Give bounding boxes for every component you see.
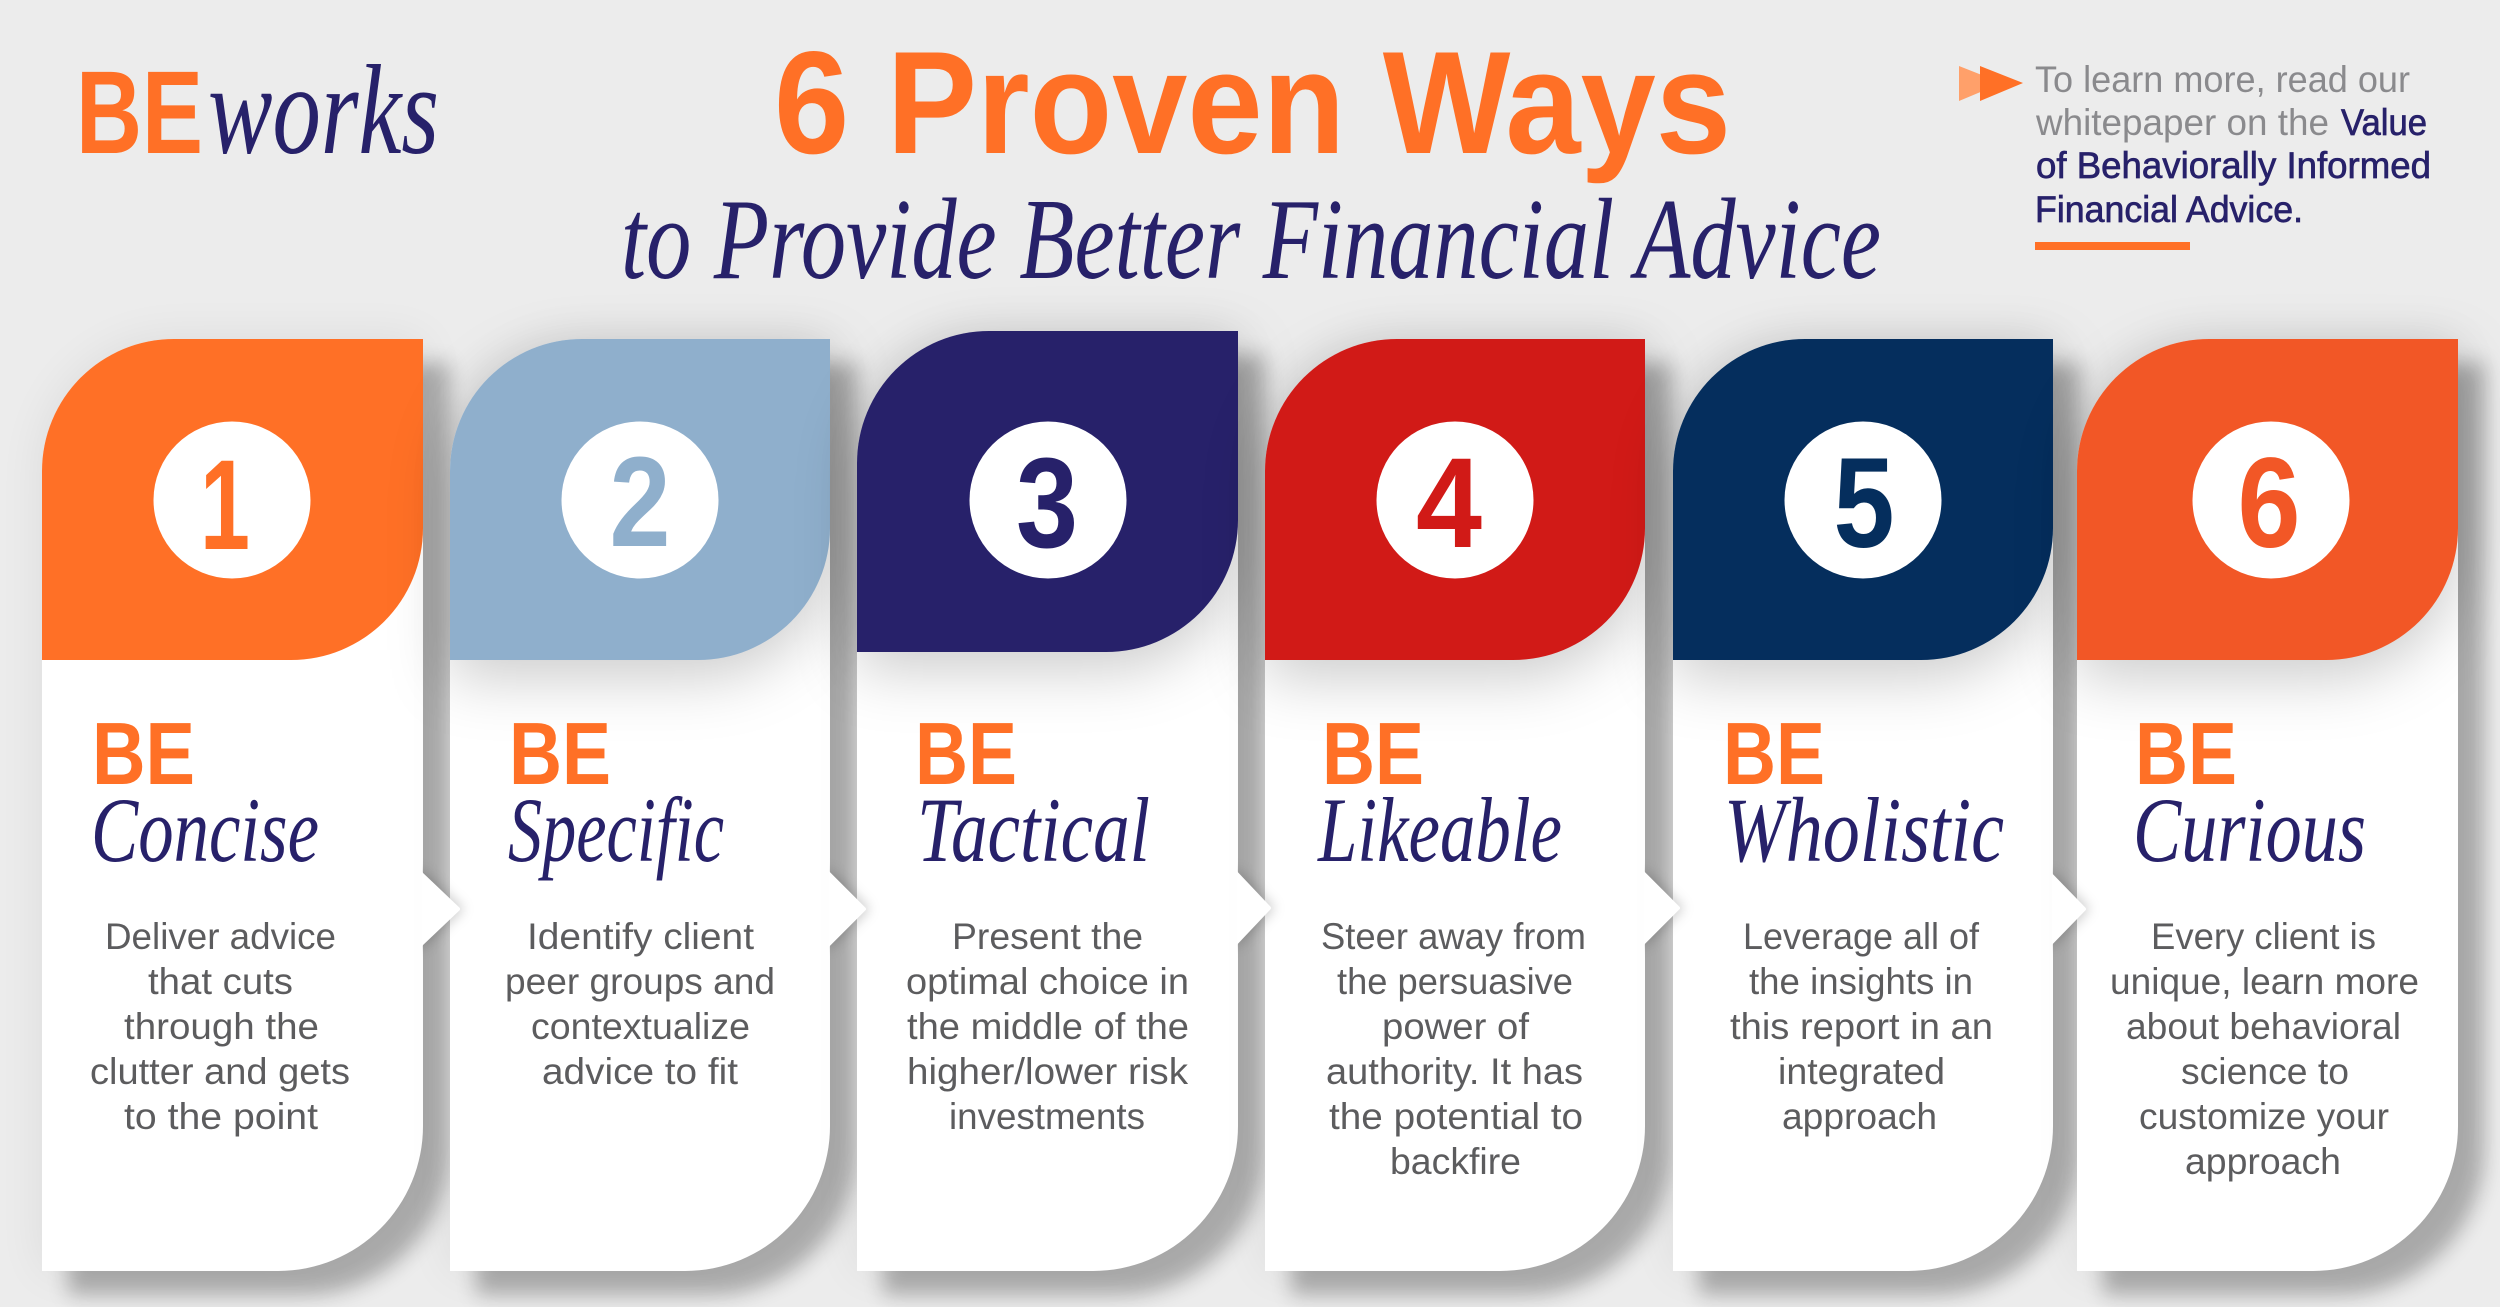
card 2 description: Identify client: [527, 916, 755, 957]
card 3 description: optimal choice in: [906, 961, 1189, 1002]
card 5 description: Leverage all of: [1743, 916, 1980, 957]
card 5 description: the insights in: [1749, 961, 1973, 1002]
card 3 description: the middle of the: [907, 1006, 1189, 1047]
card 5 header: [1673, 339, 2053, 660]
card 4 description: the potential to: [1329, 1096, 1583, 1137]
card 1 description: to the point: [124, 1096, 319, 1137]
card 2 description: contextualize: [531, 1006, 750, 1047]
card 6 description: science to: [2181, 1051, 2349, 1092]
panel: card 5 Be Wholistic: [1673, 339, 2053, 1271]
panel: card 6 Be Curious: [2077, 339, 2458, 1271]
arrow: card 4 to card 5: [1641, 871, 1678, 945]
card 6 description: Every client is: [2151, 916, 2376, 957]
card 2 description: peer groups and: [505, 961, 775, 1002]
card 4 heading: Likeable: [1316, 779, 1562, 881]
card 6 number: 6: [2238, 432, 2300, 575]
card 5 description: this report in an: [1730, 1006, 1993, 1047]
card 2 number: [562, 422, 718, 578]
logo: BEworks: [76, 39, 439, 181]
card 1 heading: Concise: [91, 779, 319, 881]
card 2 header: [450, 339, 830, 660]
callout text: Value: [2341, 102, 2427, 143]
card 4 description: Steer away from: [1321, 916, 1586, 957]
subtitle: to Provide Better Financial Advice: [621, 176, 1881, 303]
card 3 number: 3: [1016, 432, 1078, 575]
card 2 heading: BE: [509, 704, 611, 803]
card 1 description: through the: [124, 1006, 319, 1047]
panel: card 2 Be Specific: [450, 339, 830, 1271]
icon: double arrow: [1959, 66, 2023, 101]
card 1 description: clutter and gets: [90, 1051, 350, 1092]
card 4 heading: [1316, 704, 1562, 881]
card 6 header: [2077, 339, 2458, 660]
card 3 description: investments: [949, 1096, 1145, 1137]
card 6 description: [2110, 916, 2419, 1182]
card 1 description: that cuts: [148, 961, 293, 1002]
card 1 number: [154, 422, 310, 578]
card 2 heading: [508, 704, 724, 881]
callout text: of Behaviorally Informed: [2036, 145, 2431, 186]
card 6 number: [2192, 422, 2350, 578]
card 4 header: [1265, 339, 1645, 660]
card 3 heading: Tactical: [917, 779, 1150, 881]
card 1 header: [42, 339, 423, 660]
card 3 heading: BE: [915, 704, 1017, 803]
card 5 number: 5: [1834, 432, 1894, 575]
card 5 description: [1730, 916, 1993, 1137]
card 1 description: [90, 916, 350, 1137]
callout text: To learn more, read our: [2035, 59, 2410, 100]
card 4 description: the persuasive: [1337, 961, 1573, 1002]
card 1 description: Deliver advice: [105, 916, 336, 957]
card 4 description: power of: [1382, 1006, 1530, 1047]
card 3 description: Present the: [952, 916, 1143, 957]
panel: card 3 Be Tactical: [857, 331, 1238, 1271]
arrow: card 2 to card 3: [826, 871, 864, 947]
card 6 heading: [2133, 704, 2366, 881]
card 2 number: 2: [610, 431, 670, 574]
card 6 heading: BE: [2135, 704, 2237, 803]
logo: BEworks: works: [208, 39, 439, 181]
whitepaper callout: [1959, 59, 2431, 250]
card 6 description: unique, learn more: [2110, 961, 2419, 1002]
callout underline: [2035, 242, 2190, 250]
card 1 heading: BE: [92, 704, 195, 803]
card 5 description: approach: [1782, 1096, 1937, 1137]
card 6 description: customize your: [2139, 1096, 2389, 1137]
card 5 heading: Wholistic: [1724, 779, 2004, 881]
card 6 description: about behavioral: [2126, 1006, 2401, 1047]
card 3 heading: [915, 704, 1150, 881]
card 4 heading: BE: [1322, 704, 1424, 803]
card 4 number: [1376, 422, 1534, 578]
card 3 number: [970, 422, 1126, 578]
card 1 number: 1: [200, 434, 250, 577]
callout text: Financial Advice.: [2035, 189, 2303, 230]
card 4 description: [1321, 916, 1586, 1182]
card 2 description: advice to fit: [542, 1051, 739, 1092]
card 5 heading: [1723, 704, 2004, 881]
callout text: [2035, 59, 2431, 230]
logo: BEworks: BE: [76, 47, 203, 179]
card 2 description: [505, 916, 775, 1092]
card 1 heading: [91, 704, 319, 881]
panel: card 4 Be Likeable: [1265, 339, 1645, 1271]
card 5 heading: BE: [1723, 704, 1825, 803]
card 3 description: higher/lower risk: [907, 1051, 1189, 1092]
callout text: whitepaper on the: [2035, 102, 2329, 143]
arrow: card 1 to card 2: [418, 871, 458, 947]
card 5 number: [1784, 422, 1942, 578]
arrow: card 3 to card 4: [1234, 871, 1269, 945]
arrow: card 5 to card 6: [2049, 873, 2084, 945]
title: 6 Proven Ways: [774, 21, 1731, 184]
card 3 header: [857, 331, 1238, 652]
card 5 description: integrated: [1778, 1051, 1945, 1092]
card 4 description: authority. It has: [1326, 1051, 1583, 1092]
card 3 description: [906, 916, 1189, 1137]
panel: card 1 Be Concise: [42, 339, 423, 1271]
card 2 heading: Specific: [508, 779, 724, 881]
card 6 heading: Curious: [2133, 779, 2366, 881]
card 4 description: backfire: [1390, 1141, 1521, 1182]
card 4 number: 4: [1416, 432, 1482, 575]
card 6 description: approach: [2185, 1141, 2341, 1182]
